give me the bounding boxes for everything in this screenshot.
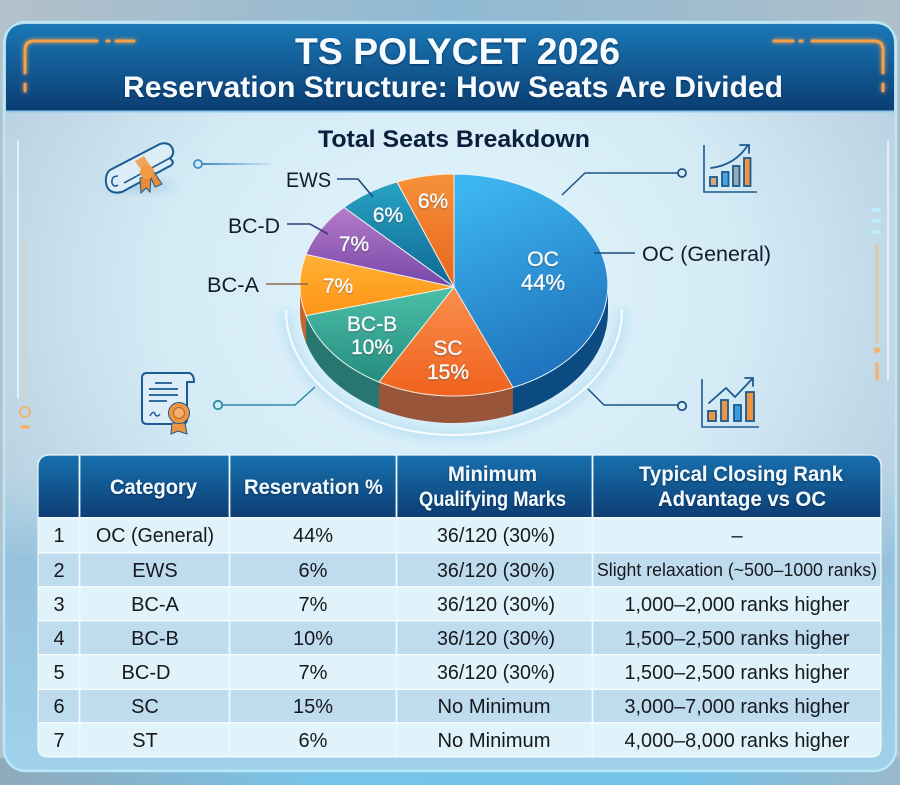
pie value labels: 6% (418, 190, 448, 213)
slice: EWS 6% (344, 182, 454, 287)
row 2: Slight relaxation (~500–1000 ranks) (597, 560, 877, 580)
slice: BC-B 10% (306, 287, 454, 382)
row 3: 1,000–2,000 ranks higher (624, 594, 850, 616)
row 4 (53, 628, 850, 650)
table header row: Minimum (448, 463, 537, 486)
icon: bar chart with zigzag arrow (702, 378, 759, 427)
row 4: 10% (293, 628, 333, 650)
row 6: No Minimum (438, 696, 550, 718)
row 5: 36/120 (30%) (437, 662, 555, 684)
label: BC-D (228, 215, 328, 238)
row 4: 36/120 (30%) (437, 628, 555, 650)
pie value labels (323, 190, 565, 384)
row 2: 36/120 (30%) (437, 560, 555, 582)
row 2: 2 (53, 560, 65, 582)
pie value labels: 6% (373, 204, 403, 227)
pie value labels: BC-B (347, 313, 397, 336)
title: TS POLYCET 2026 (295, 31, 620, 72)
table header row: Typical Closing Rank (639, 463, 843, 486)
row 5: BC-D (122, 662, 170, 684)
row 3: 3 (53, 594, 65, 616)
row 6 (53, 696, 850, 718)
pie value labels: OC (527, 248, 559, 271)
row 7: 6% (299, 730, 328, 752)
row 7: ST (132, 730, 158, 752)
row 2: 6% (299, 560, 328, 582)
slice: BC-D 7% (306, 207, 454, 287)
row 1: 36/120 (30%) (437, 525, 555, 547)
row 7: 4,000–8,000 ranks higher (624, 730, 850, 752)
label: EWS (286, 169, 373, 197)
pie value labels: 10% (351, 336, 393, 359)
label: OC (General): OC (General) (642, 242, 771, 266)
header corner accent: right (774, 41, 883, 91)
reservation table (38, 455, 881, 758)
row 3: 7% (299, 594, 328, 616)
row 5: 1,500–2,500 ranks higher (624, 662, 850, 684)
row 3: BC-A (131, 594, 180, 616)
subtitle: Reservation Structure: How Seats Are Divided (123, 71, 783, 104)
row 4: 1,500–2,500 ranks higher (624, 628, 850, 650)
table header row: Category (110, 476, 197, 499)
connector: top right (562, 169, 686, 195)
row 1: 1 (53, 525, 65, 547)
row 6: 6 (53, 696, 65, 718)
table header row (110, 463, 843, 511)
pie chart (300, 174, 608, 423)
label: BC-A: BC-A (207, 274, 259, 297)
row 4: 4 (53, 628, 65, 650)
row 2 (53, 560, 877, 582)
row 7: No Minimum (438, 730, 550, 752)
pie value labels: SC (433, 337, 463, 360)
connector: certificate (214, 387, 315, 409)
row 5: 5 (53, 662, 65, 684)
icon: diploma scroll (106, 143, 174, 193)
table header row: Reservation % (244, 476, 383, 499)
row 5 (53, 662, 850, 684)
pie value labels: 7% (339, 233, 369, 256)
row 1: 44% (293, 525, 333, 547)
label: BC-D: BC-D (228, 215, 280, 238)
side decorations (18, 141, 888, 427)
row 5: 7% (299, 662, 328, 684)
pie base ring (286, 310, 622, 435)
row 6: SC (131, 696, 159, 718)
label: BC-A (207, 274, 308, 297)
slice: SC 15% (379, 287, 513, 396)
header corner accent: left (25, 41, 134, 91)
pie side walls (300, 285, 608, 423)
row 4: BC-B (131, 628, 179, 650)
table body rows (53, 525, 877, 752)
row 1: OC (General) (96, 525, 214, 547)
header banner (6, 24, 894, 112)
pie value labels: 44% (521, 270, 565, 295)
connector: lower right (588, 389, 686, 410)
connector: diploma (194, 160, 276, 168)
row 6: 3,000–7,000 ranks higher (624, 696, 850, 718)
icon: certificate (142, 373, 194, 434)
row 3: 36/120 (30%) (437, 594, 555, 616)
table header row: Advantage vs OC (658, 488, 826, 511)
slice: OC 44% (454, 174, 608, 388)
pie value labels: 7% (323, 275, 353, 298)
slice: BC-A 7% (300, 254, 454, 316)
row 7: 7 (53, 730, 65, 752)
table header row: Qualifying Marks (419, 488, 566, 511)
row 1 (53, 525, 743, 547)
pie value labels: 15% (427, 361, 469, 384)
row 1: – (731, 525, 743, 547)
icon: bar chart with curved arrow (704, 145, 757, 192)
chart heading: Total Seats Breakdown (318, 126, 590, 153)
row 2: EWS (132, 560, 178, 582)
row 3 (53, 594, 850, 616)
label: EWS: EWS (286, 169, 331, 192)
row 6: 15% (293, 696, 333, 718)
row 7 (53, 730, 850, 752)
slice: ST 6% (397, 174, 454, 287)
